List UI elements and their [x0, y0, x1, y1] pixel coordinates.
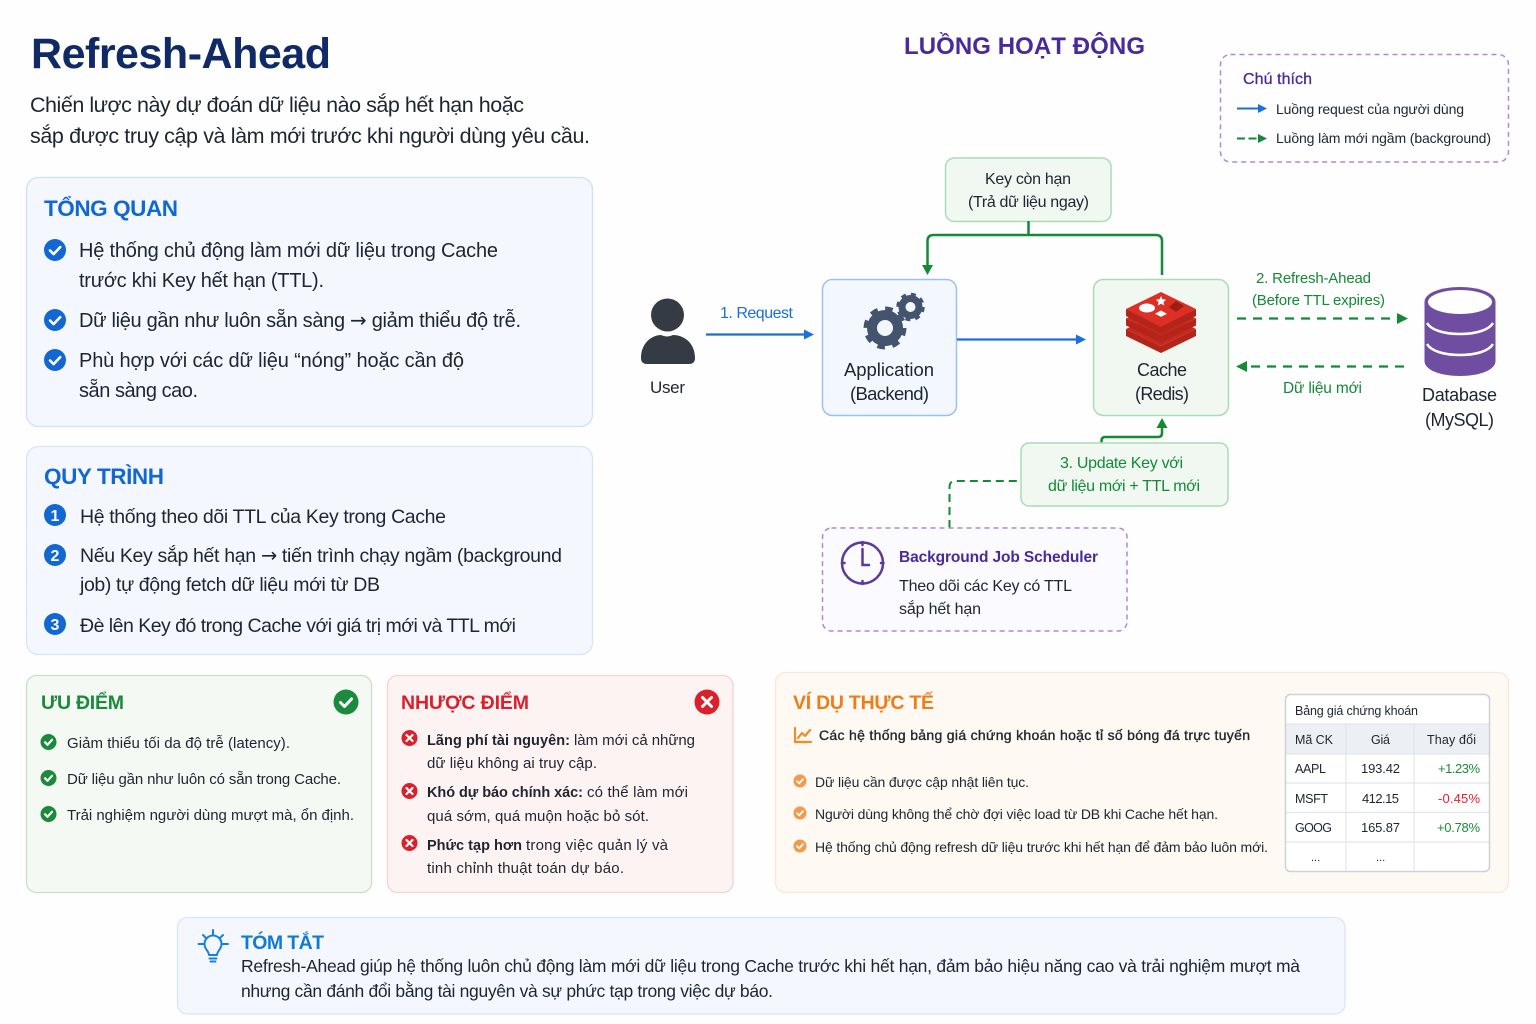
arrow: refresh-ahead [1237, 313, 1408, 324]
arrow: application to cache [957, 334, 1086, 344]
step 1: Hệ thống theo dõi TTL của Key trong Cache [80, 506, 446, 528]
example subtitle: Các hệ thống bảng giá chứng khoán hoặc tỉ số bóng đá trực tuyến [819, 727, 1250, 743]
summary text: Refresh-Ahead giúp hệ thống luôn chủ động làm mới dữ liệu trong Cache trước khi hết hạn, đảm bảo hiệu năng cao và trải nghiệm mượt mà [241, 956, 1300, 976]
item: làm mới chủ động: trước khi Key hết hạn (TTL). [79, 270, 324, 292]
node: key còn hạn: Key còn hạn [985, 171, 1071, 188]
panel: tổng quan [26, 178, 592, 426]
subtitle: Chiến lược này dự đoán dữ liệu nào sắp hết hạn hoặc [30, 92, 524, 117]
node: update key: dữ liệu mới + TTL mới [1048, 478, 1200, 495]
table: bảng giá chứng khoán: AAPL [1295, 762, 1326, 776]
table: bảng giá chứng khoán: 412.15 [1362, 791, 1399, 806]
heading: luồng hoạt động: LUỒNG HOẠT ĐỘNG [904, 32, 1145, 60]
item: phức tạp: Phức tạp hơn [427, 838, 522, 854]
table: bảng giá chứng khoán: Bảng giá chứng khoán [1295, 704, 1418, 718]
node: background job scheduler [822, 528, 1127, 631]
item: lãng phí: làm mới cả những [574, 732, 695, 749]
legend: Luồng làm mới ngầm (background) [1276, 130, 1491, 146]
item: lãng phí: dữ liệu không ai truy cập. [427, 755, 597, 772]
arrow: dữ liệu mới [1236, 361, 1404, 372]
table: bảng giá chứng khoán: 193.42 [1361, 761, 1400, 776]
summary text: nhưng cần đánh đổi bằng tài nguyên và sự phức tạp trong việc dự báo. [241, 980, 773, 1001]
step 3: 3 [50, 617, 60, 634]
step 2: 2 [50, 548, 60, 565]
panel: nhược điểm [388, 676, 733, 892]
icon: green check [334, 690, 358, 714]
item: cập nhật: Dữ liệu cần được cập nhật liên tục. [815, 774, 1029, 790]
item: dữ liệu nóng [44, 349, 464, 402]
node: update key [1021, 443, 1228, 506]
item: khó dự báo [402, 783, 688, 825]
label: database: (MySQL) [1425, 410, 1494, 430]
legend: green dashed arrow [1237, 134, 1267, 143]
item: làm mới chủ động: Hệ thống chủ động làm mới dữ liệu trong Cache [79, 240, 498, 262]
item: dữ liệu nóng: sẵn sàng cao. [79, 379, 198, 402]
icon: line chart [795, 728, 811, 742]
icon: light bulb [198, 930, 228, 962]
label: database: Database [1422, 385, 1497, 405]
step 2 [44, 544, 562, 596]
table: bảng giá chứng khoán: 165.87 [1361, 820, 1400, 835]
item: trải nghiệm: Trải nghiệm người dùng mượt mà, ổn định. [67, 807, 354, 824]
legend: Luồng request của người dùng [1276, 101, 1464, 117]
table: bảng giá chứng khoán: Thay đổi [1427, 733, 1476, 747]
item: phức tạp: tinh chỉnh thuật toán dự báo. [427, 860, 624, 877]
item: giảm độ trễ: Dữ liệu gần như luôn sẵn sàng → giảm thiểu độ trễ. [79, 308, 521, 332]
label: refresh-ahead: 2. Refresh-Ahead [1256, 270, 1371, 287]
panel: tóm tắt [178, 918, 1345, 1014]
panel: ưu điểm [26, 676, 372, 892]
label: dữ liệu mới: Dữ liệu mới [1283, 380, 1362, 397]
node: background job scheduler: Theo dõi các Key có TTL [899, 578, 1072, 595]
icon: redis [1126, 292, 1196, 353]
legend: blue arrow [1237, 104, 1267, 113]
step 3: Đè lên Key đó trong Cache với giá trị mới và TTL mới [80, 615, 516, 637]
arrow: request [706, 330, 814, 340]
legend: Chú thích [1243, 71, 1312, 88]
item: lãng phí [402, 730, 695, 772]
table: bảng giá chứng khoán: +0.78% [1437, 820, 1480, 835]
item: phức tạp: trong việc quản lý và [526, 837, 669, 854]
item: không thể chờ: Người dùng không thể chờ đợi việc load từ DB khi Cache hết hạn. [815, 806, 1218, 822]
node: application: (Backend) [850, 383, 929, 404]
node: update key: 3. Update Key với [1060, 455, 1183, 472]
table: bảng giá chứng khoán: +1.23% [1438, 761, 1480, 776]
arrow: update to cache [1102, 418, 1168, 443]
node: key còn hạn: (Trả dữ liệu ngay) [968, 194, 1089, 211]
table: bảng giá chứng khoán: MSFT [1295, 792, 1328, 806]
item: khó dự báo: quá sớm, quá muộn hoặc bỏ sót. [427, 808, 649, 825]
arrow: key còn hạn branches [922, 221, 1162, 275]
node: background job scheduler: Background Job Scheduler [899, 549, 1098, 566]
arrow: scheduler to update [950, 481, 1021, 528]
heading: tổng quan: TỔNG QUAN [44, 196, 178, 221]
node: application: Application [844, 359, 934, 380]
subtitle [30, 92, 590, 148]
legend [1220, 54, 1508, 162]
icon: user [641, 298, 695, 364]
node: cache: (Redis) [1135, 384, 1189, 404]
label: refresh-ahead: (Before TTL expires) [1252, 292, 1385, 309]
item: làm mới chủ động [44, 239, 498, 292]
table: bảng giá chứng khoán: ... [1376, 852, 1385, 864]
node: cache [1094, 280, 1228, 416]
icon: gears [866, 294, 923, 347]
table: bảng giá chứng khoán: Mã CK [1295, 733, 1334, 747]
icon: database [1424, 287, 1496, 376]
step 2: job) tự động fetch dữ liệu mới từ DB [79, 574, 380, 596]
node: key còn hạn [946, 158, 1111, 222]
summary text [241, 956, 1300, 1001]
table: bảng giá chứng khoán: ... [1311, 852, 1320, 864]
panel: quy trình [26, 446, 592, 654]
item: khó dự báo: Khó dự báo chính xác: [427, 785, 583, 801]
heading: nhược điểm: NHƯỢC ĐIỂM [401, 691, 529, 714]
label: user: User [650, 378, 685, 397]
step 2: Nếu Key sắp hết hạn → tiến trình chạy ngầm (background [80, 544, 562, 567]
item: phức tạp [402, 835, 669, 877]
heading: quy trình: QUY TRÌNH [44, 464, 164, 489]
table: bảng giá chứng khoán: Giá [1371, 733, 1390, 747]
node: cache: Cache [1137, 360, 1187, 380]
table: bảng giá chứng khoán [1286, 694, 1490, 872]
label: database [1422, 385, 1497, 430]
item: dữ liệu nóng: Phù hợp với các dữ liệu “nóng” hoặc cần độ [79, 350, 464, 372]
heading: tóm tắt: TÓM TẮT [241, 930, 324, 954]
icon: clock [842, 542, 884, 584]
item: refresh chủ động: Hệ thống chủ động refresh dữ liệu trước khi hết hạn để đảm bảo luôn mới. [815, 839, 1268, 855]
table: bảng giá chứng khoán: GOOG [1295, 821, 1332, 835]
heading: ưu điểm: ƯU ĐIỂM [41, 691, 124, 714]
title: Refresh-Ahead [31, 30, 331, 78]
node: application [822, 280, 956, 416]
node: background job scheduler: sắp hết hạn [899, 599, 981, 618]
panel: ví dụ thực tế [776, 672, 1508, 892]
icon: red cross [694, 690, 720, 714]
item: khó dự báo: có thể làm mới [587, 784, 688, 801]
item: lãng phí: Lãng phí tài nguyên: [427, 733, 570, 749]
subtitle: sắp được truy cập và làm mới trước khi người dùng yêu cầu. [30, 123, 590, 148]
item: sẵn trong cache: Dữ liệu gần như luôn có sẵn trong Cache. [67, 771, 341, 788]
item: độ trễ: Giảm thiểu tối da độ trễ (latency). [67, 735, 290, 752]
table: bảng giá chứng khoán: -0.45% [1438, 791, 1480, 806]
label: request: 1. Request [720, 305, 794, 322]
heading: ví dụ thực tế: VÍ DỤ THỰC TẾ [793, 691, 934, 714]
step 1: 1 [50, 508, 60, 525]
label: refresh-ahead [1252, 270, 1385, 309]
